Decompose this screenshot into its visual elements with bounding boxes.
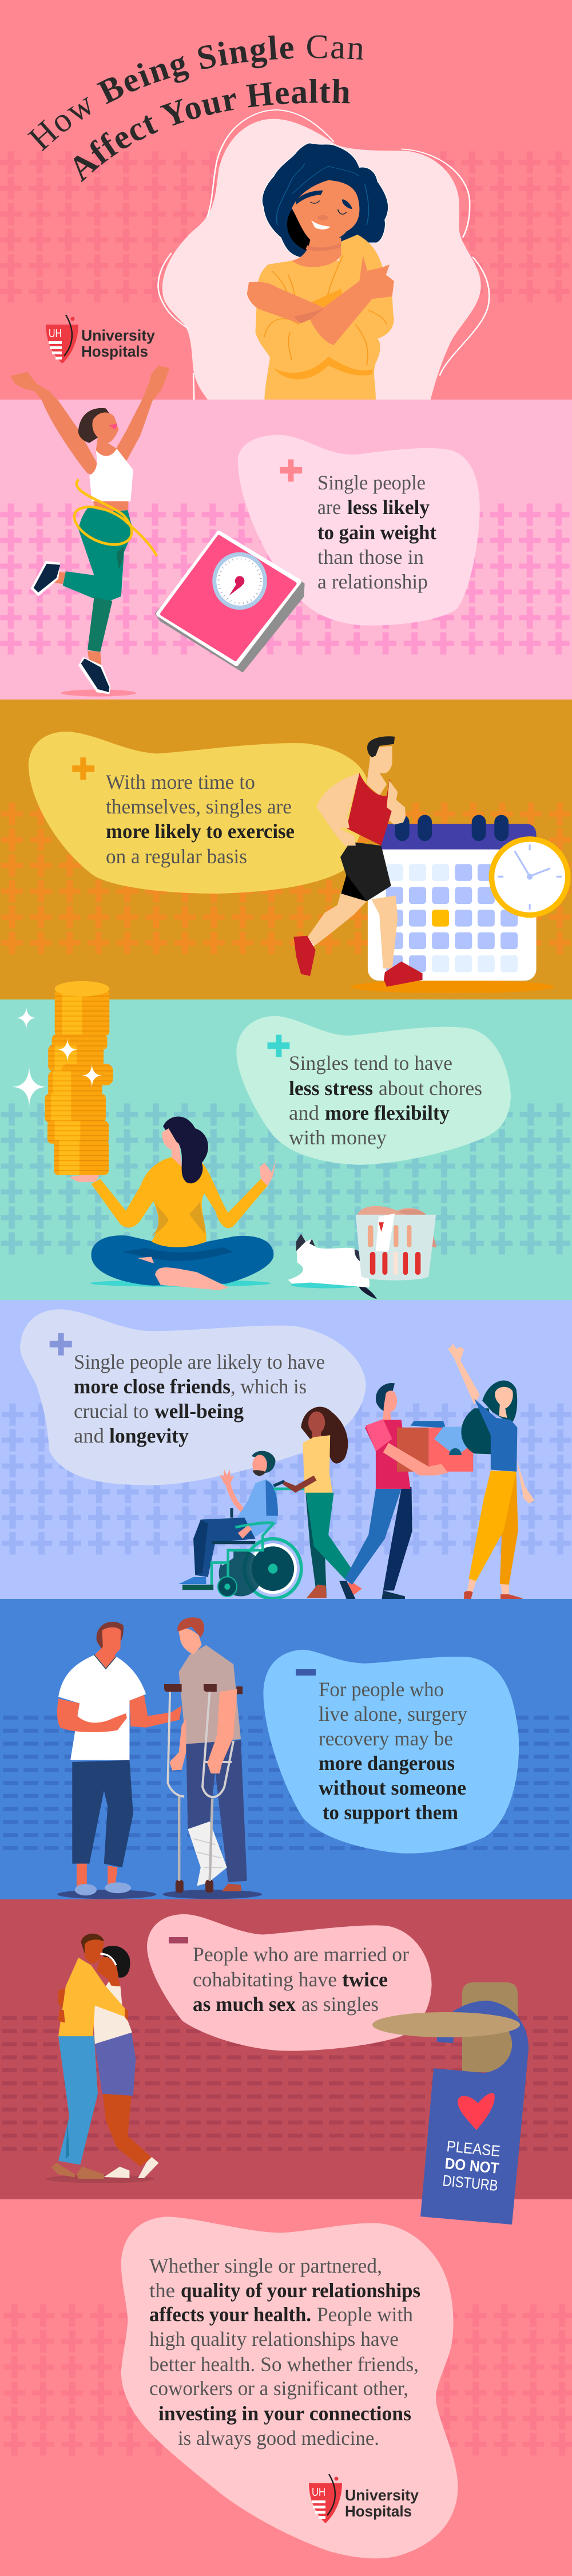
text: stress: with money [289,1126,387,1149]
icon: laundry basket [356,1206,436,1281]
text: couples: twice [342,1968,388,1991]
speech bubble [263,1650,519,1854]
panel: intro [0,35,570,400]
panel: more close friends [0,1300,572,1600]
icon: door hanger: PLEASE [446,2138,501,2160]
text: weight: Single people [317,471,426,494]
text: surgery: more dangerous [319,1752,455,1775]
text: couples: as singles [301,1993,379,2016]
text: surgery: For people who [319,1678,444,1701]
icon: bathroom scale [156,534,304,671]
speech bubble [147,1914,432,2051]
panel: surgery recovery [0,1599,572,1900]
text: couples: cohabitating have [193,1968,337,1991]
text: stress [289,1052,482,1149]
text: closing: affects your health. [149,2303,311,2326]
logo: UH [312,2486,325,2499]
logo: Hospitals [81,343,148,360]
text: closing [149,2254,420,2449]
text: closing: coworkers or a significant other, [149,2377,408,2400]
text: couples: People who are married or [193,1943,409,1966]
text: friends: and [74,1424,104,1447]
illustration: cat [288,1234,377,1299]
text: stress: less stress [289,1077,373,1100]
text: weight: than those in [317,546,424,568]
text: surgery: without someone [319,1776,466,1799]
text: weight: a relationship [317,570,428,593]
text: closing: quality of your relationships [181,2279,420,2302]
text: stress: more flexibilty [325,1101,450,1124]
logo [309,2474,419,2523]
icon: door hanger [372,1982,529,2225]
panel: more likely to exercise [0,700,572,1001]
plus icon [50,1333,72,1356]
text: closing: People with [317,2303,413,2326]
minus icon [169,1937,188,1943]
illustration: runner [293,736,423,987]
illustration: coin stack [45,981,113,1175]
text: exercise [106,771,295,868]
hair [262,143,388,258]
text: friends: well-being [154,1400,244,1423]
plus icon [72,757,94,780]
text: exercise: With more time to [106,771,255,793]
illustration: woman waving [448,1343,534,1600]
speech bubble [238,435,480,626]
text: surgery: recovery may be [319,1727,453,1750]
text: closing: Whether single or partnered, [149,2254,382,2277]
icon: door hanger: DO NOT [444,2155,500,2177]
plus icon [280,460,302,481]
text: closing: is always good medicine. [178,2427,379,2449]
icon: calendar and clock [350,815,571,993]
shirt [255,235,394,400]
icon: door hanger: DISTURB [442,2172,499,2194]
logo: University [345,2487,419,2504]
illustration: woman hugging herself [158,110,489,400]
illustration: supporting friend [57,1622,182,1899]
text: surgery [319,1678,467,1824]
blob outline [158,110,489,400]
text: friends: , which is [231,1375,307,1398]
text: exercise: on a regular basis [106,845,247,868]
text: closing: better health. So whether friends, [149,2353,419,2376]
logo: UH [49,327,62,340]
logo: University [81,327,155,344]
text: couples: as much sex [193,1993,296,2016]
blob background [162,119,481,400]
neck and face [292,238,341,267]
text: surgery: to support them [323,1801,458,1824]
plus icon [268,1035,289,1057]
illustration: woman with tape measure [11,365,170,697]
text: surgery: live alone, surgery [319,1702,467,1725]
speech bubble [236,1016,511,1165]
illustration: meditating woman [69,1117,276,1290]
illustration: man on crutches [162,1617,262,1899]
icon: sparkles [11,1006,103,1108]
text: stress: Singles tend to have [289,1052,452,1074]
tape measure [74,479,157,556]
text: closing: investing in your connections [158,2402,411,2425]
title: Affect Your Health [74,79,350,182]
text: friends: longevity [109,1424,189,1447]
speech bubble [29,732,367,894]
crossed arms [247,282,325,323]
text: stress: about chores [379,1077,482,1100]
text: friends: Single people are likely to have [74,1350,325,1373]
panel: closing message [0,2199,572,2576]
illustration: man carrying box [339,1383,474,1600]
text: closing: high quality relationships have [149,2328,399,2350]
panel: less likely to gain weight [0,365,572,700]
illustration: man in wheelchair [179,1451,307,1599]
illustration: woman pushing wheelchair [283,1406,362,1598]
text: weight [317,471,436,593]
text: exercise: themselves, singles are [106,795,292,818]
illustration: embracing couple [46,1934,158,2183]
text: friends [74,1350,325,1447]
speech bubble [121,2217,458,2558]
text: weight: to gain weight [317,521,436,544]
speech bubble [20,1309,366,1485]
panel: less stress [0,981,572,1301]
text: couples [193,1943,409,2016]
text: closing: the [149,2279,175,2302]
text: friends: crucial to [74,1400,149,1423]
text: weight: are [317,496,341,519]
text: exercise: more likely to exercise [106,820,295,843]
logo: Hospitals [345,2503,412,2520]
text: friends: more close friends [74,1375,231,1398]
minus icon [296,1669,316,1676]
logo [46,315,155,364]
title: How Being Single Can [27,35,363,151]
panel: twice as much sex [0,1899,572,2225]
text: weight: less likely [347,496,430,519]
text: stress: and [289,1101,319,1124]
